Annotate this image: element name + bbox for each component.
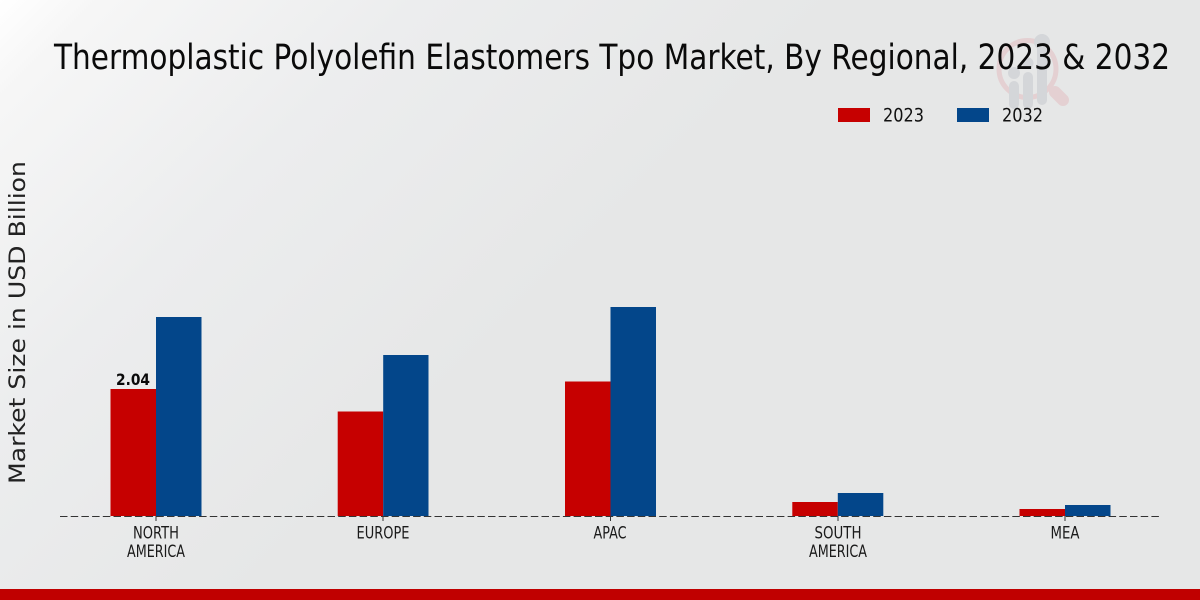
legend: 2023: 2023 — [883, 104, 924, 126]
label: America: AMERICA — [127, 542, 186, 561]
label: APAC: APAC — [594, 524, 626, 542]
label: Europe: EUROPE — [356, 524, 410, 542]
bars: APAC — [565, 307, 656, 516]
value label: 2.04 — [116, 370, 150, 389]
bars: MEA — [1020, 505, 1110, 516]
legend: 2032 — [957, 104, 1043, 126]
legend — [838, 104, 1043, 126]
footer bar — [0, 589, 1200, 600]
y axis title: Market Size in USD Billion — [6, 161, 31, 484]
label: North America: NORTH — [133, 524, 179, 542]
bars: North America — [110, 317, 202, 516]
bars: Europe — [338, 355, 428, 516]
label: America (South): AMERICA — [809, 542, 868, 561]
legend: 2023 — [838, 104, 924, 126]
legend: 2032: 2032 — [1002, 104, 1043, 126]
x axis baseline — [60, 516, 1160, 521]
label: South: SOUTH — [814, 524, 862, 542]
bars: South America — [792, 493, 883, 516]
label: MEA: MEA — [1050, 524, 1080, 542]
x axis labels — [127, 524, 1080, 561]
icon: watermark logo — [999, 34, 1063, 104]
